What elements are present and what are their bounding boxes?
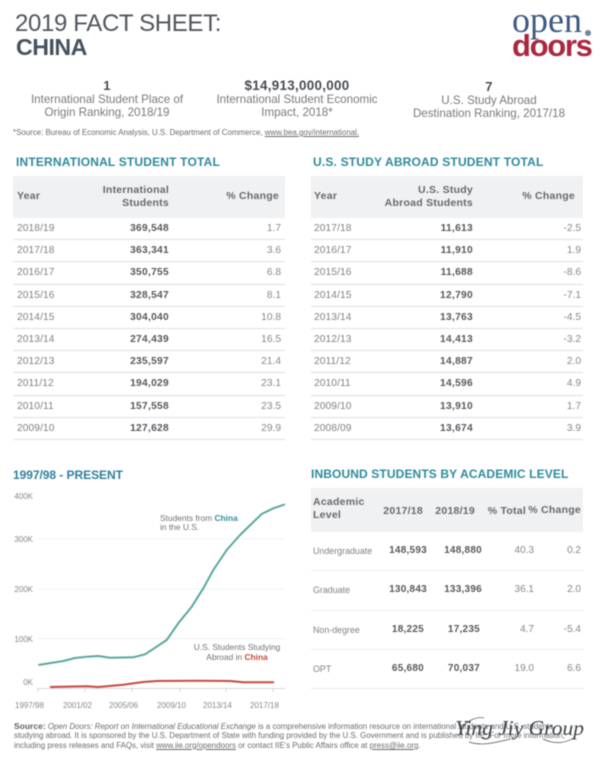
table: inbound students by academic level: 4.7 [520,624,534,635]
source note: *Source: Bureau of Economic Analysis, U.S. Department of Commerce, www.bea.gov/international. [13,128,359,137]
table: inbound students by academic level: Graduate [313,585,350,595]
table: international student total: 2015/16 [17,290,55,301]
table: us study abroad student total: 13,674 [440,423,473,434]
table: international student total: 2010/11 [17,401,54,412]
table: us study abroad student total: 11,613 [441,223,473,234]
table: inbound students by academic level: Undergraduate [313,546,372,556]
table header: Academic [313,496,365,508]
logo: open doors: doors [512,28,592,63]
stat: economic impact: $14,913,000,000 [244,78,350,92]
stat: study abroad destination ranking: Destination Ranking, 2017/18 [413,107,565,120]
table header: 2017/18 [383,505,423,517]
table: us study abroad student total: 2015/16 [314,267,352,278]
table: international student total: 23.1 [261,378,281,389]
table: inbound students by academic level: 148,593 [389,545,427,556]
axis labels: 100K [14,635,34,644]
table: inbound students by academic level [311,488,583,689]
table header [311,176,583,218]
table: international student total: 1.7 [267,223,281,234]
line: us students abroad in china [50,681,274,687]
heading: 1997/98 present: 1997/98 - PRESENT [13,468,123,482]
table: international student total: 127,628 [130,423,169,434]
annotation: us students abroad: U.S. Students Studying [194,642,281,652]
watermark: Ying Jiy Group: Ying Jiy Group [455,716,584,740]
table: us study abroad student total: 2.0 [567,356,581,367]
table: us study abroad student total: 4.9 [567,378,581,389]
table: international student total: 2012/13 [17,356,55,367]
table: international student total: 274,439 [130,334,169,345]
stat: place of origin ranking: International Student Place of [31,92,183,106]
line: students from china in the us [38,504,285,665]
table: us study abroad student total: 2012/13 [314,334,352,345]
table: inbound students by academic level: 19.0 [515,663,534,674]
table: us study abroad student total: 14,596 [440,378,473,389]
table: international student total: 2014/15 [17,312,55,323]
table: inbound students by academic level: 65,680 [392,663,424,674]
table: us study abroad student total: 14,413 [440,334,473,345]
table: inbound students by academic level: Non-degree [313,625,360,635]
table: international student total: 29.9 [261,423,281,434]
table: international student total: 363,341 [130,245,169,256]
table: international student total: 2017/18 [17,245,55,256]
source footer: including press releases and FAQs, visit www.iie.org/opendoors or contact IIE's Public Affairs office at press@iie.org. [14,741,421,750]
table header [311,488,583,532]
table: inbound students by academic level: 18,225 [392,624,424,635]
table: international student total: 6.8 [267,267,281,278]
logo: open doors: open [512,0,582,40]
table: us study abroad student total: -4.5 [563,312,581,323]
table: international student total: 304,040 [130,312,169,323]
table: us study abroad student total: 2013/14 [314,312,352,323]
axis labels: 400K [14,492,34,501]
axis labels: 1997/98 [15,701,44,710]
stat: study abroad destination ranking: U.S. Study Abroad [441,94,537,106]
table: inbound students by academic level: 133,396 [444,584,482,595]
table: international student total: 2016/17 [17,267,55,278]
table: us study abroad student total: 14,887 [440,356,473,367]
stat: place of origin ranking: Origin Ranking, 2018/19 [44,106,170,119]
source footer: Source: Open Doors: Report on International Educational Exchange is a comprehensive information resource on international students and U.S. students [14,721,553,731]
table: inbound students by academic level: -5.4 [564,624,581,635]
table: inbound students by academic level: OPT [313,664,331,674]
axis labels: 200K [14,585,34,594]
table header: International [103,184,169,196]
table: inbound students by academic level: 6.6 [567,663,581,674]
table: international student total: 2009/10 [17,423,55,434]
annotation: us students abroad: Abroad in China [206,652,268,662]
table: international student total: 16.5 [261,334,281,345]
table: international student total: 369,548 [130,223,169,234]
heading: international student total: INTERNATIONAL STUDENT TOTAL [16,155,220,169]
table: international student total: 194,029 [130,378,169,389]
axis labels: 2005/06 [109,701,138,710]
table: inbound students by academic level: 2.0 [567,584,581,595]
table: international student total: 2013/14 [17,334,55,345]
table: us study abroad student total: 2016/17 [314,245,352,256]
table: international student total: 23.5 [261,401,281,412]
table: us study abroad student total: -2.5 [563,223,581,234]
table: international student total: 10.8 [261,312,281,323]
table: us study abroad student total: 2010/11 [314,378,351,389]
table: inbound students by academic level: 130,843 [389,584,427,595]
table: international student total: 3.6 [267,245,281,256]
table: inbound students by academic level: 36.1 [515,584,534,595]
table: us study abroad student total: -3.2 [563,334,581,345]
heading: inbound students by academic level: INBOUND STUDENTS BY ACADEMIC LEVEL [311,467,568,481]
table: us study abroad student total: 13,763 [440,312,473,323]
table: us study abroad student total: 13,910 [440,401,473,412]
table: us study abroad student total: 1.9 [567,245,581,256]
table: inbound students by academic level: 148,880 [444,545,482,556]
stat: study abroad destination ranking [413,78,566,120]
table header: % Change [522,190,575,202]
table header: U.S. Study [418,184,473,196]
table: inbound students by academic level: 70,037 [448,663,480,674]
table header: % Change [528,504,581,516]
table: us study abroad student total: 2014/15 [314,290,352,301]
table: international student total [13,176,285,440]
table: international student total: 2018/19 [17,223,55,234]
table: us study abroad student total: 2008/09 [314,423,352,434]
table header: Level [313,509,341,521]
stat: place of origin ranking [31,78,184,120]
table: international student total: 328,547 [130,290,169,301]
heading: us study abroad student total: U.S. STUDY ABROAD STUDENT TOTAL [313,155,543,169]
title: CHINA [16,34,87,60]
table: us study abroad student total: 2017/18 [314,223,352,234]
stat: place of origin ranking: 1 [103,78,111,92]
axis labels: 0K [23,678,34,687]
table: inbound students by academic level: 40.3 [515,545,534,556]
table: us study abroad student total: 12,790 [440,290,473,301]
table header: % Change [226,190,279,202]
table: international student total: 350,755 [130,267,169,278]
annotation: students from china: in the U.S. [160,522,199,532]
table: inbound students by academic level: 0.2 [567,545,581,556]
annotation: students from china: Students from China [160,513,238,523]
annotation: us students abroad [194,642,281,662]
table: us study abroad student total: 2009/10 [314,401,352,412]
axis labels: 300K [14,535,34,544]
title: 2019 FACT SHEET: [15,10,221,37]
table: international student total: 157,558 [130,401,169,412]
axis labels: 2001/02 [63,701,92,710]
table header: Year [17,190,40,202]
table: international student total: 8.1 [267,290,281,301]
source footer: studying abroad. It is sponsored by the U.S. Department of State with funding provided by the U.S. Government and is published by IIE. For more information, [14,731,565,740]
stat: economic impact: International Student Economic [216,92,378,106]
table: us study abroad student total: 2011/12 [314,356,351,367]
source footer [14,721,565,751]
axis labels: 2017/18 [250,701,279,710]
table: us study abroad student total: -8.6 [563,267,581,278]
logo: open doors [512,0,592,63]
table: international student total: 235,597 [130,356,169,367]
table: us study abroad student total: -7.1 [563,290,581,301]
stat: study abroad destination ranking: 7 [485,78,493,94]
line chart: students over time [14,492,286,710]
table header: % Total [488,505,526,517]
title [15,10,221,60]
table: us study abroad student total: 11,910 [441,245,473,256]
stat: economic impact [216,78,378,119]
table header [13,176,285,218]
table: us study abroad student total [311,176,583,440]
annotation: students from china [160,513,238,532]
axis labels: 2009/10 [157,701,186,710]
table header: 2018/19 [435,505,475,517]
table header: Students [122,197,169,209]
stat: economic impact: Impact, 2018* [261,106,333,119]
table header: Abroad Students [385,197,473,209]
table: us study abroad student total: 1.7 [567,401,581,412]
table header: Year [314,190,337,202]
axis labels: 2013/14 [203,701,232,710]
table: international student total: 2011/12 [17,378,54,389]
table: us study abroad student total: 11,688 [441,267,473,278]
table: inbound students by academic level: 17,235 [448,624,480,635]
table: international student total: 21.4 [261,356,281,367]
table: us study abroad student total: 3.9 [567,423,581,434]
axis labels [14,492,279,710]
